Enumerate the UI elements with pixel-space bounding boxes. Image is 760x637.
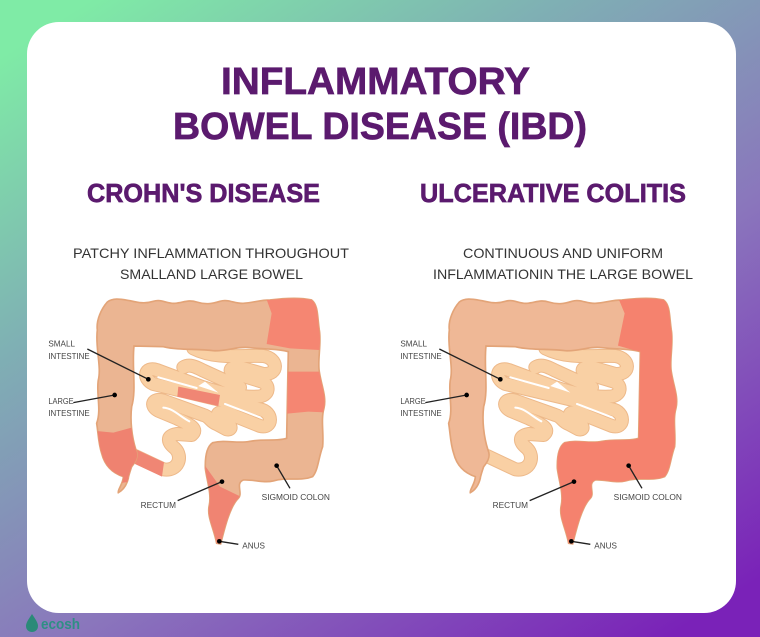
labels and leader lines: INTESTINE xyxy=(400,408,442,418)
labels and leader lines xyxy=(48,339,330,551)
labels and leader lines: RECTUM xyxy=(141,500,176,510)
title: BOWEL DISEASE (IBD) xyxy=(173,106,587,148)
heading: ulcerative colitis: ULCERATIVE COLITIS xyxy=(420,178,686,208)
logo: ecosh: ecosh xyxy=(41,616,80,633)
description: Crohn's disease: SMALLAND LARGE BOWEL xyxy=(120,266,303,282)
description: Crohn's disease: PATCHY INFLAMMATION THROUGHOUT xyxy=(73,245,349,261)
labels and leader lines: RECTUM xyxy=(493,500,528,510)
labels and leader lines: INTESTINE xyxy=(400,351,442,361)
diagram: Crohn's disease bowel xyxy=(48,295,330,551)
description: Crohn's disease xyxy=(73,245,349,282)
description: ulcerative colitis xyxy=(433,245,693,282)
labels and leader lines: SMALL xyxy=(48,339,75,349)
description: ulcerative colitis: INFLAMMATIONIN THE LARGE BOWEL xyxy=(433,266,693,282)
labels and leader lines: SIGMOID COLON xyxy=(262,492,330,502)
title: INFLAMMATORY xyxy=(221,61,530,103)
labels and leader lines: INTESTINE xyxy=(48,408,90,418)
labels and leader lines: LARGE xyxy=(48,396,74,406)
diagram: ulcerative colitis bowel xyxy=(400,295,685,553)
labels and leader lines: SIGMOID COLON xyxy=(614,492,682,502)
labels and leader lines: INTESTINE xyxy=(48,351,90,361)
labels and leader lines xyxy=(400,339,682,551)
logo: ecosh xyxy=(26,614,80,633)
description: ulcerative colitis: CONTINUOUS AND UNIFORM xyxy=(463,245,663,261)
labels and leader lines: ANUS xyxy=(242,541,265,551)
title xyxy=(173,61,587,148)
labels and leader lines: SMALL xyxy=(400,339,427,349)
labels and leader lines: LARGE xyxy=(400,396,426,406)
labels and leader lines: ANUS xyxy=(594,541,617,551)
heading: Crohn's disease: CROHN'S DISEASE xyxy=(87,178,320,208)
